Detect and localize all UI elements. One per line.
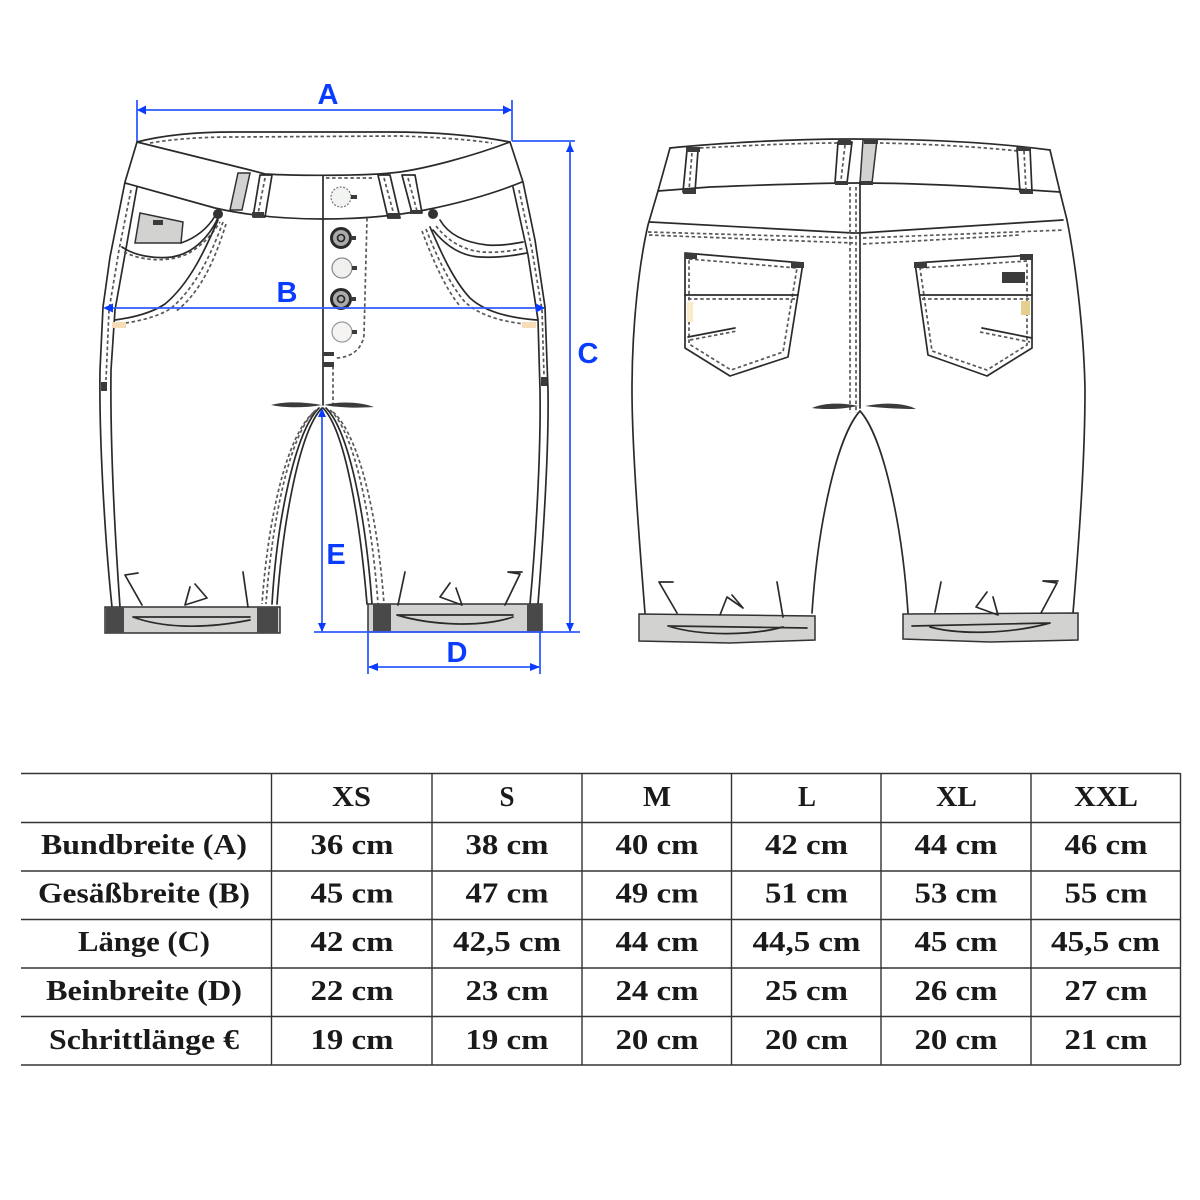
front left side seam: [100, 142, 137, 607]
back centre seam: [850, 183, 860, 413]
row: hip width: 53 cm: [914, 878, 998, 910]
row: leg width: 22 cm: [310, 975, 394, 1007]
front belt loops: [230, 173, 422, 218]
right back pocket: [914, 254, 1033, 376]
row: waist width: 40 cm: [616, 829, 698, 861]
row: hip width: 55 cm: [1064, 878, 1148, 910]
front right cuff: [368, 572, 542, 632]
header row: XS: [332, 781, 371, 813]
row: leg width: 27 cm: [1064, 975, 1148, 1007]
row: inseam length: [49, 1024, 1148, 1056]
arrow A: waist width: A: [318, 79, 339, 111]
header row: [332, 781, 1138, 813]
row: hip width: [38, 878, 1148, 910]
row: hip width: 49 cm: [616, 878, 698, 910]
arrow D: leg width: D: [447, 637, 467, 669]
row: hip width: Gesäßbreite (B): [38, 878, 250, 910]
right front pocket: [422, 209, 537, 328]
row: length: Länge (C): [78, 926, 210, 958]
row: leg width: 23 cm: [466, 975, 548, 1007]
back waistband: [658, 139, 1060, 192]
row: length: 45 cm: [914, 926, 998, 958]
row: inseam length: 19 cm: [466, 1024, 548, 1056]
front buttons: [331, 187, 357, 342]
back belt loops: [683, 139, 1033, 194]
back outline: [632, 148, 1085, 613]
row: length: 45,5 cm: [1051, 926, 1160, 958]
front crotch seams: [262, 402, 384, 604]
row: length: 42,5 cm: [453, 926, 561, 958]
row: waist width: 46 cm: [1064, 829, 1148, 861]
measurement arrows: [103, 79, 599, 674]
header row: S: [500, 781, 514, 813]
row: hip width: 45 cm: [310, 878, 394, 910]
row: waist width: 38 cm: [466, 829, 548, 861]
arrow C: total length: C: [578, 338, 599, 370]
table grid: [21, 773, 1180, 1065]
back yoke: [648, 220, 1064, 244]
row: hip width: 51 cm: [765, 878, 848, 910]
arrow E: inseam length: E: [326, 539, 346, 571]
back view of shorts: [632, 139, 1085, 643]
header row: L: [798, 781, 816, 813]
row: leg width: 25 cm: [765, 975, 848, 1007]
row: waist width: 36 cm: [310, 829, 394, 861]
row: length: [78, 926, 1160, 958]
header row: M: [643, 781, 671, 813]
front view of shorts: [100, 132, 548, 633]
row: inseam length: 21 cm: [1064, 1024, 1148, 1056]
front left cuff: [105, 572, 280, 633]
row: waist width: 44 cm: [914, 829, 998, 861]
back left cuff: [639, 582, 815, 643]
arrow D: leg width: [368, 632, 540, 674]
row: length: 42 cm: [310, 926, 394, 958]
size table: [21, 773, 1180, 1065]
row: inseam length: 20 cm: [914, 1024, 998, 1056]
front right side seam: [510, 142, 548, 604]
row: length: 44 cm: [616, 926, 698, 958]
front fly and placket: [323, 176, 372, 405]
row: inseam length: 19 cm: [310, 1024, 394, 1056]
row: inseam length: 20 cm: [765, 1024, 848, 1056]
arrow B: hip width: [103, 277, 545, 312]
row: leg width: Beinbreite (D): [46, 975, 242, 1007]
back crotch seams: [812, 404, 916, 613]
row: waist width: Bundbreite (A): [41, 829, 247, 861]
row: length: 44,5 cm: [752, 926, 860, 958]
arrow B: hip width: B: [277, 277, 297, 309]
left front pocket: [112, 209, 226, 328]
front waistband: [125, 132, 522, 219]
row: leg width: 24 cm: [616, 975, 698, 1007]
arrow A: waist width: [137, 79, 512, 141]
row: inseam length: 20 cm: [616, 1024, 698, 1056]
row: leg width: [46, 975, 1148, 1007]
back right cuff: [903, 581, 1078, 642]
header row: XXL: [1074, 781, 1138, 813]
row: leg width: 26 cm: [914, 975, 998, 1007]
row: hip width: 47 cm: [466, 878, 548, 910]
left back pocket: [685, 253, 804, 376]
row: waist width: [41, 829, 1148, 861]
arrow C: total length: [314, 141, 599, 632]
row: waist width: 42 cm: [765, 829, 848, 861]
row: inseam length: Schrittlänge €: [49, 1024, 240, 1056]
arrow E: inseam length: [318, 408, 346, 632]
header row: XL: [936, 781, 977, 813]
